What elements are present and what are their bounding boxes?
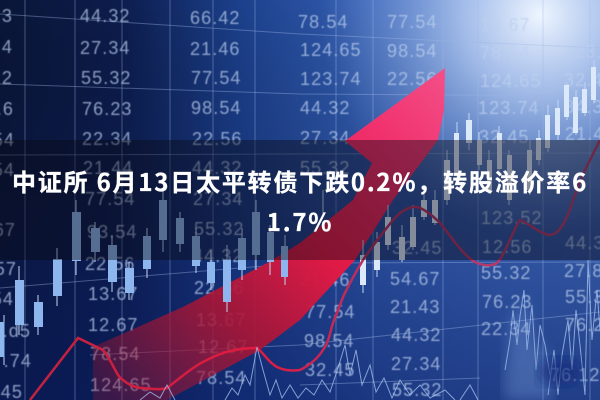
number columns: 55.32 xyxy=(392,380,443,400)
number columns: 54.67 xyxy=(390,269,441,289)
number columns: 76.23 xyxy=(482,292,533,312)
number columns: 32.45 xyxy=(392,238,443,258)
number columns: 55.32 xyxy=(481,263,532,283)
number columns: 78.54 xyxy=(90,344,141,364)
number columns: 77.54 xyxy=(85,189,136,209)
number columns: 12.67 xyxy=(198,337,249,357)
number columns: 55.32 xyxy=(300,158,351,178)
light wave fill xyxy=(505,300,552,400)
number columns: 123.52 xyxy=(481,208,543,228)
number columns: .74 xyxy=(4,351,32,371)
number columns: 98.54 xyxy=(191,98,242,118)
number columns: 123.74 xyxy=(300,69,362,89)
number columns: 27.34 xyxy=(193,189,244,209)
number columns: 77.54 xyxy=(191,68,242,88)
number columns: 93.54 xyxy=(87,222,138,242)
number columns: 21.43 xyxy=(390,297,441,317)
number columns: 22.56 xyxy=(387,69,438,89)
candlesticks xyxy=(0,60,596,365)
number columns: 44.32 xyxy=(391,325,442,345)
number columns: 98.54 xyxy=(304,331,355,351)
number columns: 98.54 xyxy=(387,41,438,61)
number columns: 22.34 xyxy=(82,129,133,149)
number columns: 27.34 xyxy=(300,128,351,148)
number columns: 44.32 xyxy=(80,6,131,26)
number columns: 12.56 xyxy=(482,237,533,257)
red arrow xyxy=(93,68,445,400)
spiky waveforms xyxy=(140,260,600,400)
number columns: 22.56 xyxy=(194,278,245,298)
number columns: 76.23 xyxy=(82,99,133,119)
number columns: 22.34 xyxy=(481,319,532,339)
number columns: 32.45 xyxy=(479,127,530,147)
number columns: 78.54 xyxy=(480,43,531,63)
number columns: 124.65 xyxy=(480,71,542,91)
number columns: 3 xyxy=(2,6,13,26)
number columns: 44.32 xyxy=(300,98,351,118)
red trend line xyxy=(30,140,600,400)
number columns: 124.65 xyxy=(300,40,362,60)
number columns: 13.67 xyxy=(196,310,247,330)
number columns: 77.54 xyxy=(305,302,356,322)
number columns: .d5 xyxy=(3,321,31,341)
number columns: 124.65 xyxy=(90,375,152,395)
number columns: 13.67 xyxy=(88,284,139,304)
number columns: 123.74 xyxy=(478,98,540,118)
number columns: 55.32 xyxy=(81,68,132,88)
number columns: 77.54 xyxy=(387,12,438,32)
number columns: 21.44 xyxy=(83,158,134,178)
title: 1.7% xyxy=(267,203,333,238)
number columns: 12.67 xyxy=(88,315,139,335)
number columns: 32.45 xyxy=(305,360,356,380)
title: 中证所 6月13日太平转债下跌0.2%，转股溢价率6 xyxy=(12,163,588,198)
number columns: 44.32 xyxy=(193,246,244,266)
number columns: 22.56 xyxy=(85,254,136,274)
number columns: 21.46 xyxy=(300,270,351,290)
title xyxy=(12,163,588,238)
number columns: 27.34 xyxy=(80,38,131,58)
number columns: 44.32 xyxy=(192,158,243,178)
number columns: 78.54 xyxy=(298,12,349,32)
number columns: 78.54 xyxy=(196,368,247,388)
number columns: 27.34 xyxy=(391,354,442,374)
number columns: 12.67 xyxy=(480,15,531,35)
number columns: 22.56 xyxy=(192,129,243,149)
dark patch xyxy=(538,358,582,386)
title band xyxy=(0,140,600,260)
number columns: 55.32 xyxy=(194,219,245,239)
number columns: 76.12 xyxy=(550,365,600,385)
number columns: 66.42 xyxy=(190,8,241,28)
number columns: 21.46 xyxy=(190,39,241,59)
